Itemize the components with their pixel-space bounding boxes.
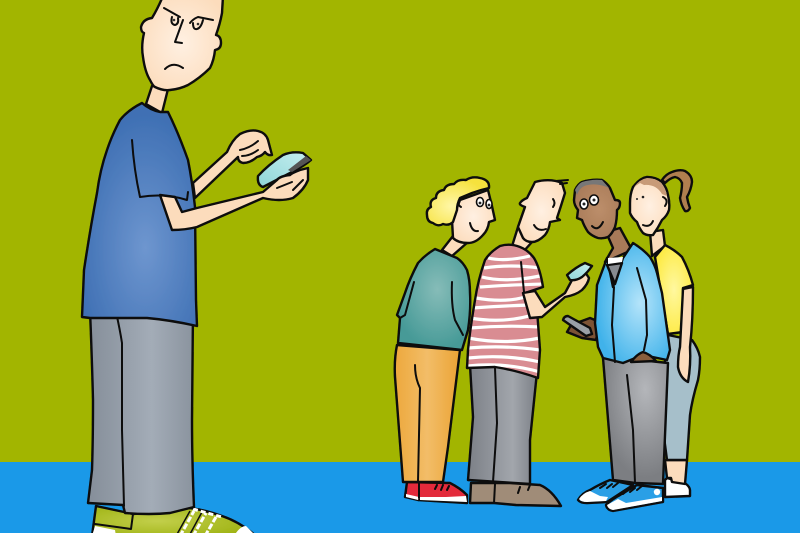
head and face (574, 180, 620, 238)
arm and hand (523, 272, 589, 318)
front arm and hand (160, 168, 308, 230)
figure: boy in striped shirt (467, 180, 592, 506)
arm and hand (678, 287, 693, 382)
brown shoes (470, 483, 561, 506)
grey trousers (603, 358, 668, 484)
blue sneakers (578, 480, 663, 511)
figure: angry boy with phone (82, 0, 311, 533)
yellow t-shirt (655, 245, 693, 334)
neck (605, 228, 632, 262)
light trousers (664, 335, 700, 460)
hand in pocket (631, 352, 656, 362)
background: blue floor (0, 462, 800, 533)
teal top (397, 249, 470, 350)
neck (650, 230, 665, 256)
head: frowning face (141, 0, 223, 90)
ponytail (662, 170, 692, 211)
t-shirt: blue (82, 103, 197, 326)
bare ankles (665, 460, 687, 484)
blue jacket (595, 243, 670, 363)
grey undershirt (607, 263, 622, 284)
neck (146, 86, 168, 113)
shoes: green sneakers (92, 506, 256, 533)
phone held by boy (258, 152, 311, 187)
grey trousers (468, 362, 537, 484)
figure: boy in blue jacket (563, 180, 670, 511)
phone held up (567, 263, 592, 280)
red sneakers (405, 482, 467, 503)
head and face (630, 177, 669, 235)
striped t-shirt (467, 245, 545, 378)
rear arm and pointing hand (193, 130, 272, 198)
figure: blonde girl (395, 177, 495, 503)
head and face (518, 180, 568, 242)
hand holding phone (563, 316, 600, 340)
neck (512, 207, 532, 252)
figure: girl with ponytail (630, 170, 700, 497)
head and face (427, 177, 495, 243)
illustration: all figures (82, 0, 700, 533)
orange trousers (395, 345, 460, 482)
white sneaker (665, 478, 690, 497)
trousers: grey (88, 310, 194, 514)
neck (442, 236, 468, 256)
blonde hair (427, 177, 489, 225)
